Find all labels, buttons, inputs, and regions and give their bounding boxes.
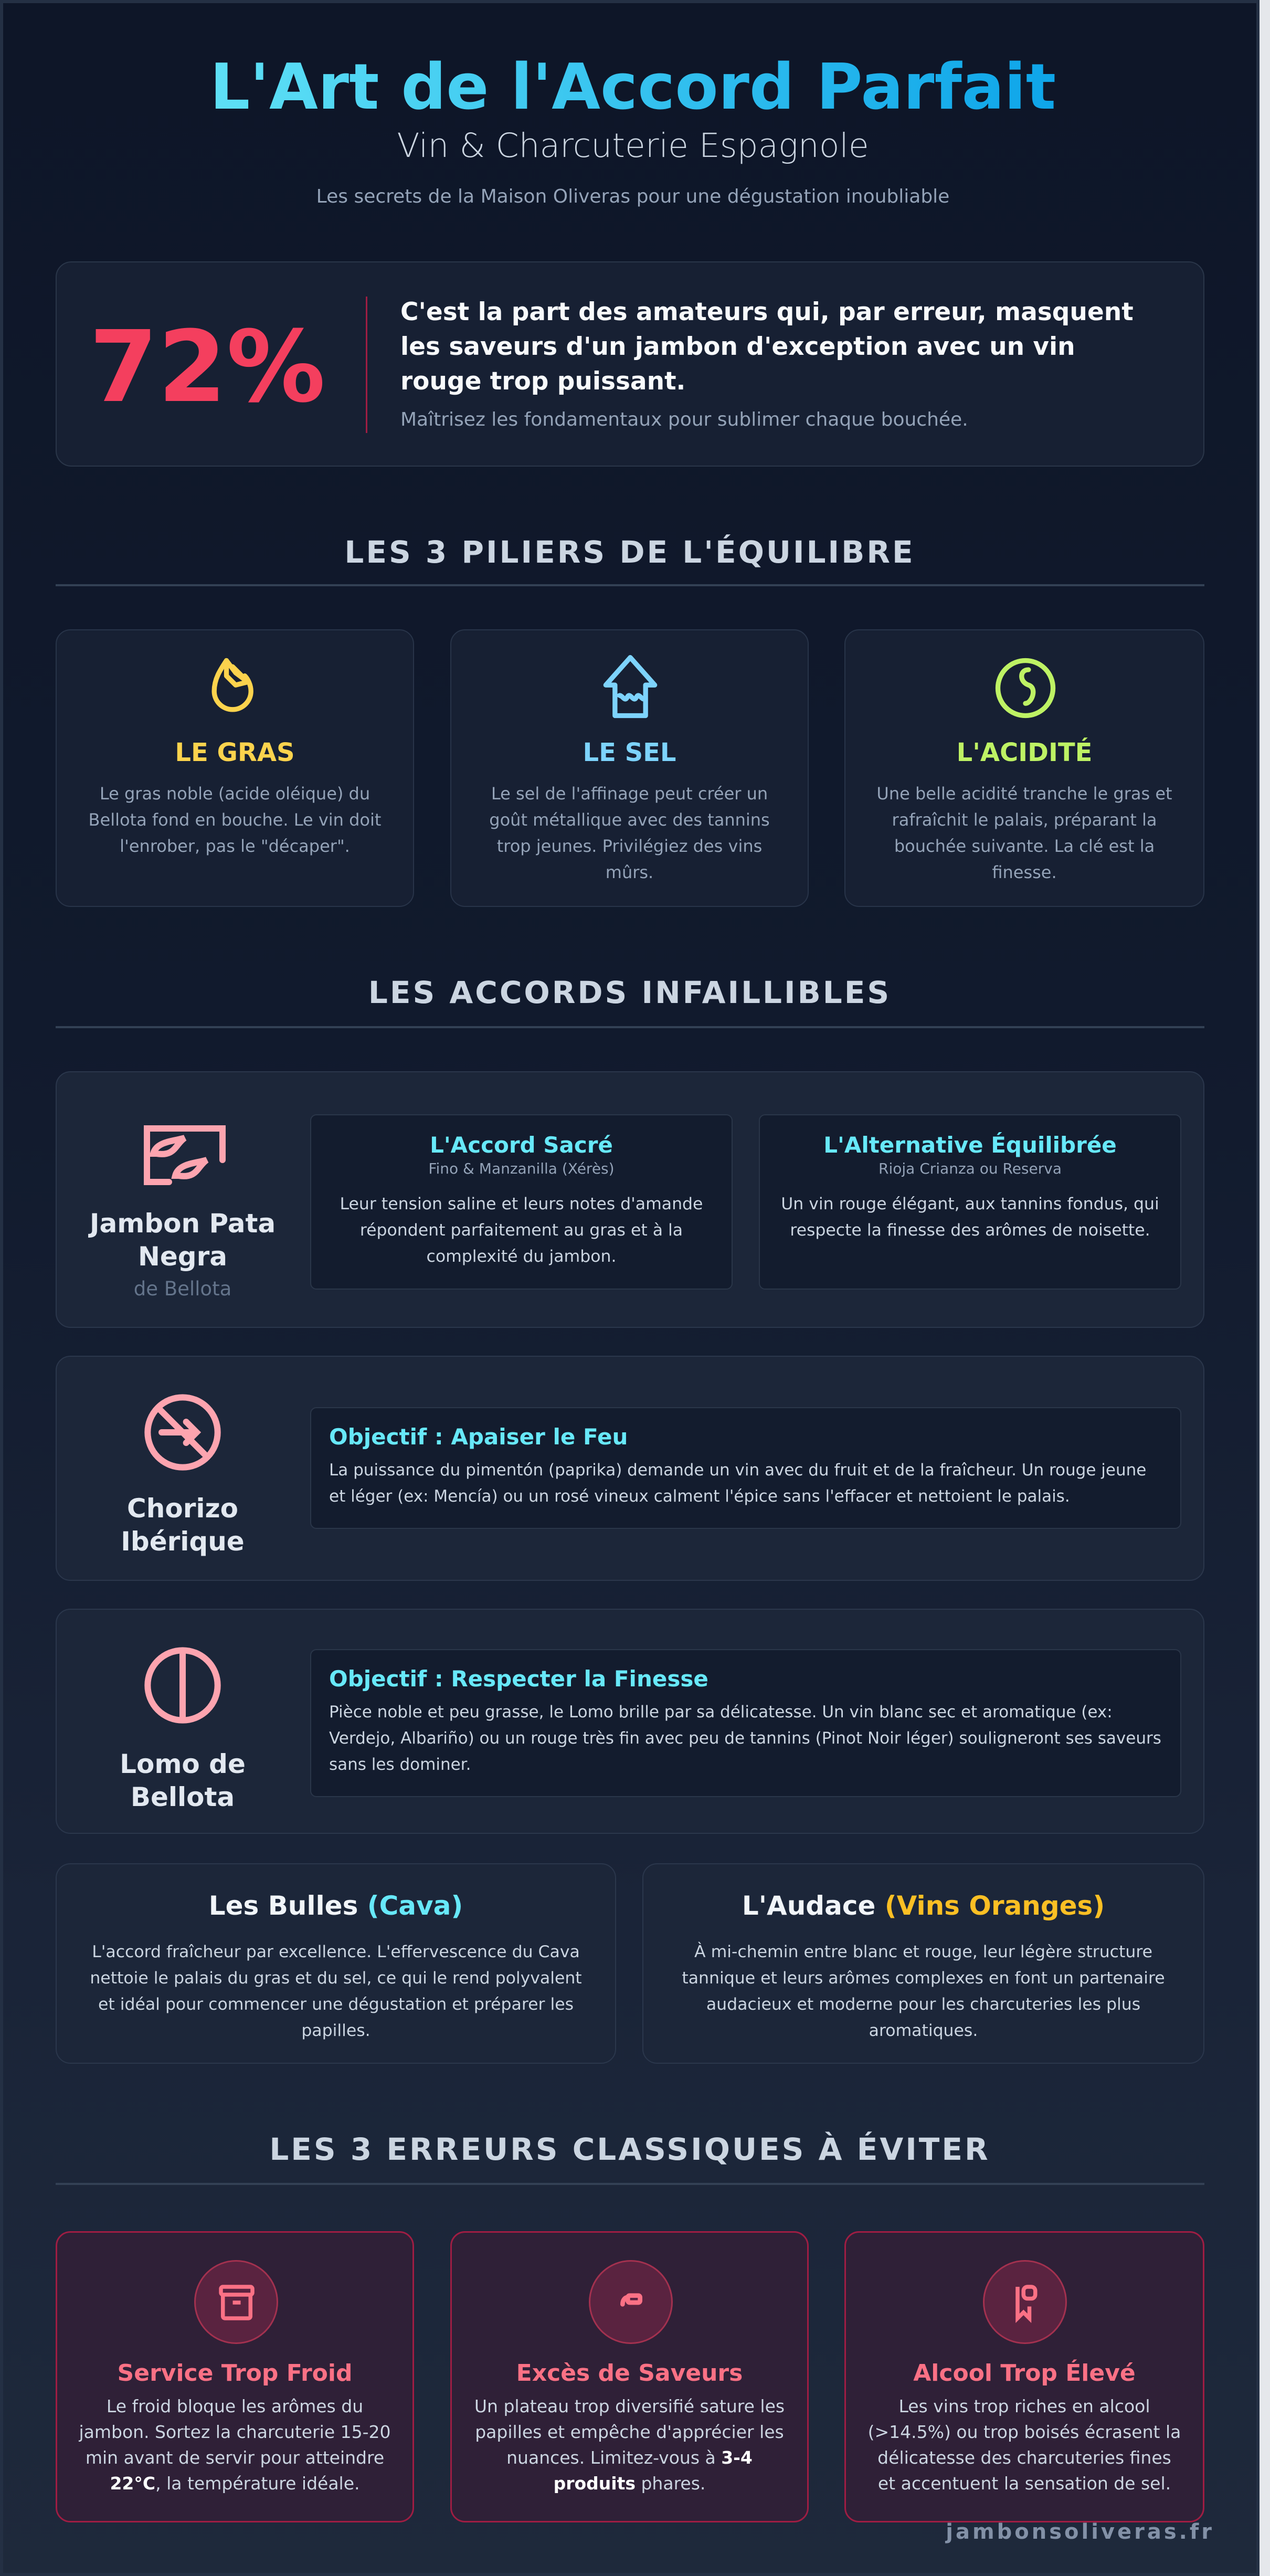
box: alternative: Rioja Crianza ou Reserva xyxy=(879,1160,1062,1177)
name: Bellota xyxy=(131,1782,235,1812)
icon: circle s xyxy=(995,658,1056,718)
text: À mi-chemin entre blanc et rouge, leur légère structure tannique et leurs arômes complexes en font un partenaire audacieux et moderne pour les charcuteries les plus aromatiques. xyxy=(682,1942,1165,2040)
name: Jambon Pata xyxy=(90,1208,276,1239)
name xyxy=(121,1493,245,1557)
title: Les Bulles (Cava) xyxy=(209,1891,463,1921)
box: accord sacré: L'Accord Sacré xyxy=(430,1132,613,1158)
box: alternative: Un vin rouge élégant, aux tannins fondus, qui respecte la finesse des arômes de noisette. xyxy=(781,1195,1159,1240)
text: L'accord fraîcheur par excellence. L'effervescence du Cava nettoie le palais du gras et du sel, ce qui le rend polyvalent et idéal pour commencer une dégustation et préparer les papilles. xyxy=(90,1942,582,2040)
box: alternative xyxy=(759,1114,1181,1290)
name: Negra xyxy=(138,1241,227,1272)
panel: excès: Un plateau trop diversifié sature les papilles et empêche d'apprécier les nuances. Limitez-vous à 3-4 produits phares. xyxy=(474,2396,785,2494)
panel: excès xyxy=(450,2231,809,2522)
icon: tap xyxy=(589,2260,673,2344)
panel: le gras xyxy=(56,629,414,907)
name: Chorizo xyxy=(127,1493,238,1524)
panel: alcool: Alcool Trop Élevé xyxy=(913,2360,1136,2387)
title: LE GRAS xyxy=(175,738,295,767)
box: apaiser: Objectif : Apaiser le Feu xyxy=(329,1424,628,1450)
panel: alcool: Les vins trop riches en alcool (>14.5%) ou trop boisés écrasent la délicatesse des charcuteries fines et accentuent la sensation de sel. xyxy=(868,2396,1181,2494)
title: L'Audace (Vins Oranges) xyxy=(742,1891,1105,1921)
icon: drop xyxy=(212,658,253,712)
heading: accords: LES ACCORDS INFAILLIBLES xyxy=(368,975,891,1010)
icon: ham board xyxy=(144,1125,226,1185)
box: apaiser: La puissance du pimentón (paprika) demande un vin avec du fruit et de la fraîcheur. Un rouge jeune et léger (ex: Mencía) ou un rosé vineux calment l'épice sans l'effacer et nettoient le palais. xyxy=(329,1461,1146,1506)
title: LE SEL xyxy=(583,738,676,767)
icon: badge xyxy=(983,2260,1067,2344)
panel: audace xyxy=(642,1863,1204,2064)
panel: excès: Excès de Saveurs xyxy=(516,2360,743,2387)
panel: alcool xyxy=(844,2231,1204,2522)
footer: jambonsoliveras.fr xyxy=(946,2520,1214,2544)
panel: acidité xyxy=(844,629,1204,907)
panel: jambon xyxy=(56,1071,1204,1328)
stat panel xyxy=(56,261,1204,467)
icon: half circle xyxy=(144,1647,221,1724)
icon: bin xyxy=(194,2260,278,2344)
tagline: Les secrets de la Maison Oliveras pour une dégustation inoubliable xyxy=(316,186,949,207)
heading: erreurs: LES 3 ERREURS CLASSIQUES À ÉVITER xyxy=(269,2131,990,2167)
panel: service trop froid xyxy=(56,2231,414,2522)
icon: house xyxy=(604,655,657,718)
text: Le sel de l'affinage peut créer un goût métallique avec des tannins trop jeunes. Privilégiez des vins mûrs. xyxy=(489,784,770,882)
box: apaiser xyxy=(310,1407,1181,1529)
icon: no fire xyxy=(144,1394,221,1471)
name: Lomo de xyxy=(120,1749,246,1779)
box: alternative: L'Alternative Équilibrée xyxy=(823,1132,1117,1158)
title: L'Art de l'Accord Parfait xyxy=(210,51,1056,124)
panel: chorizo xyxy=(56,1356,1204,1581)
panel: lomo xyxy=(56,1609,1204,1834)
name: Ibérique xyxy=(121,1526,245,1557)
heading: piliers: LES 3 PILIERS DE L'ÉQUILIBRE xyxy=(344,534,915,570)
name xyxy=(88,1208,276,1272)
text: Le gras noble (acide oléique) du Bellota fond en bouche. Le vin doit l'enrober, pas le "décaper". xyxy=(89,784,381,856)
subtitle: Vin & Charcuterie Espagnole xyxy=(397,126,869,165)
box: finesse: Objectif : Respecter la Finesse xyxy=(329,1666,708,1692)
box: accord sacré: Fino & Manzanilla (Xérès) xyxy=(428,1160,615,1177)
box: finesse xyxy=(310,1649,1181,1797)
stat number: 72% xyxy=(89,310,325,425)
text: Une belle acidité tranche le gras et rafraîchit le palais, préparant la bouchée suivante. La clé est la finesse. xyxy=(876,784,1172,882)
divider xyxy=(366,297,367,433)
panel: le sel xyxy=(450,629,809,907)
sub name: de Bellota xyxy=(134,1278,231,1300)
panel: service trop froid: Service Trop Froid xyxy=(118,2360,352,2387)
box: accord sacré: Leur tension saline et leurs notes d'amande répondent parfaitement au gras et à la complexité du jambon. xyxy=(340,1195,703,1266)
title: L'ACIDITÉ xyxy=(957,738,1092,767)
stat text: C'est la part des amateurs qui, par erreur, masquent les saveurs d'un jambon d'exception avec un vin rouge trop puissant. xyxy=(400,298,1134,396)
box: accord sacré xyxy=(310,1114,733,1290)
box: finesse: Pièce noble et peu grasse, le Lomo brille par sa délicatesse. Un vin blanc sec et aromatique (ex: Verdejo, Albariño) ou un rouge très fin avec peu de tannins (Pinot Noir léger) souligneront ses saveurs sans les dominer. xyxy=(329,1703,1161,1774)
stat subtext: Maîtrisez les fondamentaux pour sublimer chaque bouchée. xyxy=(400,409,968,430)
panel: bulles xyxy=(56,1863,616,2064)
name xyxy=(120,1749,246,1812)
panel: service trop froid: Le froid bloque les arômes du jambon. Sortez la charcuterie 15-20 min avant de servir pour atteindre 22°C, la température idéale. xyxy=(79,2396,391,2494)
